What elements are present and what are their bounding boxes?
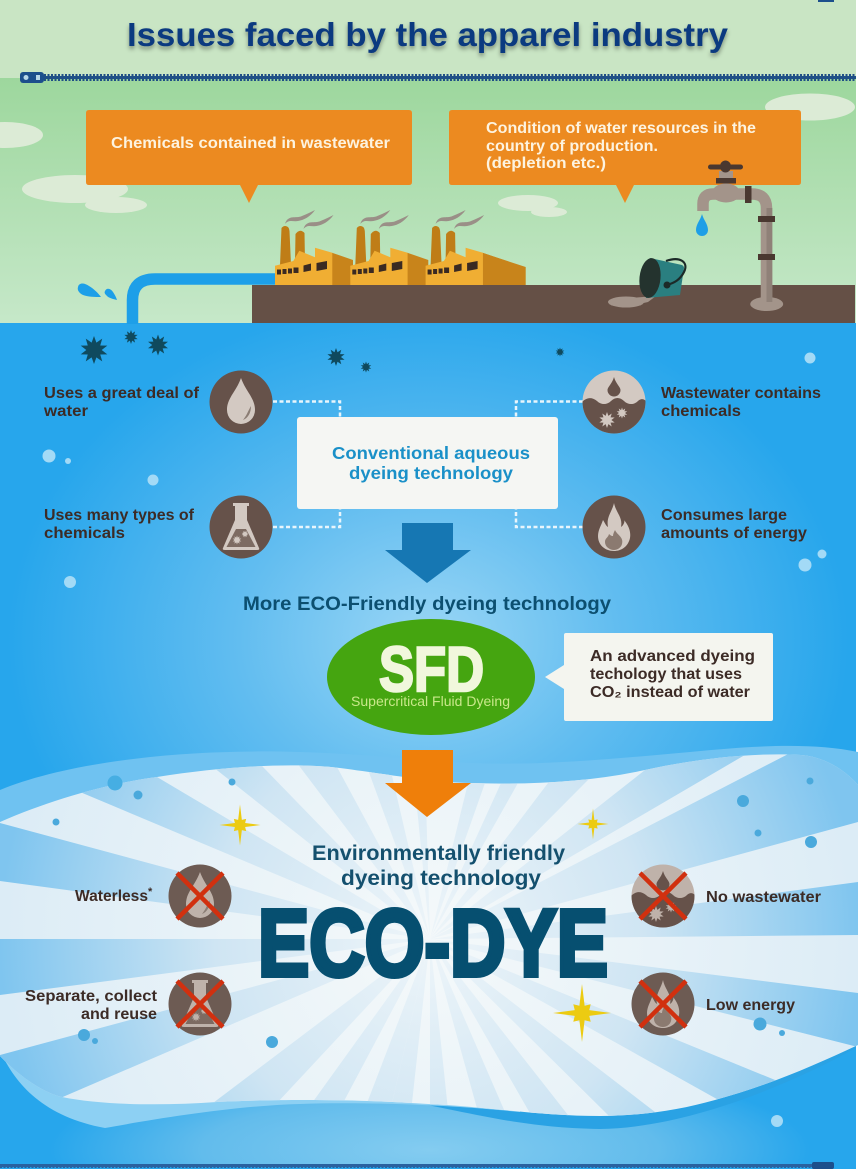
- wave: upper swoosh: [0, 746, 858, 840]
- benefit: waterless: [75, 864, 232, 928]
- benefit: no wastewater: No wastewater: [706, 889, 821, 906]
- clouds: [0, 94, 855, 217]
- bottom glow: [0, 1090, 856, 1165]
- issue: uses a great deal of water: Uses a great deal of: [44, 385, 200, 402]
- issue: uses many types of chemicals: Uses many types of: [44, 507, 195, 524]
- arrow: blue down: [385, 523, 471, 583]
- benefit: waterless: *: [148, 886, 153, 898]
- benefit: separate, collect and reuse: and reuse: [81, 1006, 157, 1023]
- wastewater pipe: [132, 279, 277, 324]
- callout: chemicals in wastewater: Chemicals contained in wastewater: [111, 135, 390, 152]
- benefit: no wastewater: [631, 864, 821, 928]
- benefit: separate, collect and reuse: [25, 972, 232, 1036]
- issue: uses a great deal of water: [43, 370, 272, 434]
- zipper: bottom: [0, 1162, 834, 1169]
- heading: more eco-friendly: More ECO-Friendly dyeing technology: [243, 594, 611, 615]
- small blue dots: [52, 776, 817, 1127]
- callout: condition of water resources: Condition of water resources in the: [486, 120, 756, 137]
- callout: chemicals in wastewater: [86, 110, 412, 203]
- badge: SFD: SFD: [379, 635, 484, 705]
- icon: dripping faucet: [696, 160, 783, 311]
- icon: water splashes: [78, 284, 117, 300]
- issue: consumes large amounts of energy: Consumes large: [661, 507, 787, 524]
- callout: SFD description: techology that uses: [590, 666, 742, 683]
- callout: condition of water resources: [449, 110, 801, 203]
- zipper: top: [20, 72, 856, 83]
- arrow: orange down: [385, 750, 471, 817]
- badge: SFD: Supercritical Fluid Dyeing: [351, 693, 510, 709]
- benefit: separate, collect and reuse: Separate, collect: [25, 988, 158, 1005]
- benefit: low energy: Low energy: [706, 997, 795, 1014]
- panel: conventional aqueous dyeing technology: dyeing technology: [349, 463, 513, 483]
- callout: condition of water resources: (depletion etc.): [486, 155, 606, 172]
- heading: ECO-DYE: ECO-DYE: [258, 890, 608, 996]
- callout: SFD description: [545, 633, 773, 721]
- panel: conventional aqueous dyeing technology: [297, 417, 558, 509]
- wave: lower swoosh dark: [400, 1030, 856, 1129]
- panel: title header band: [0, 0, 856, 78]
- callout: SFD description: CO₂ instead of water: [590, 684, 750, 701]
- heading: environmentally friendly: [312, 842, 565, 890]
- benefit: waterless: Waterless: [75, 888, 148, 905]
- panel: sunburst rays banner: [0, 754, 858, 1116]
- issue: uses many types of chemicals: [44, 496, 272, 558]
- ground: [252, 285, 855, 324]
- dark chemical particles: [81, 330, 564, 372]
- wave: lower swoosh light: [0, 1040, 520, 1128]
- heading: environmentally friendly: Environmentally friendly: [312, 842, 565, 865]
- issue: consumes large amounts of energy: amounts of energy: [661, 525, 807, 542]
- panel: green landscape sky: [0, 78, 856, 324]
- issue: wastewater contains chemicals: [582, 370, 821, 434]
- issue: uses a great deal of water: water: [43, 403, 88, 420]
- heading: environmentally friendly: dyeing technology: [341, 867, 541, 890]
- callout: condition of water resources: country of production.: [486, 138, 658, 155]
- zipper pull: top right corner: [818, 0, 834, 2]
- dotted connectors: [273, 402, 583, 527]
- badge: SFD: [327, 619, 535, 735]
- title: Issues faced by the apparel industry: [127, 16, 729, 53]
- benefit: low energy: [632, 972, 795, 1036]
- factories: [275, 210, 526, 285]
- icon: bucket and puddle: [608, 257, 685, 308]
- yellow sparkles: [220, 804, 611, 1042]
- water bubbles: [42, 352, 826, 588]
- issue: wastewater contains chemicals: chemicals: [661, 403, 741, 420]
- water background: [0, 323, 856, 1169]
- issue: wastewater contains chemicals: Wastewater contains: [661, 385, 821, 402]
- panel: conventional aqueous dyeing technology: Conventional aqueous: [332, 443, 530, 463]
- callout: SFD description: An advanced dyeing: [590, 648, 755, 665]
- issue: uses many types of chemicals: chemicals: [44, 525, 125, 542]
- issue: consumes large amounts of energy: [582, 496, 807, 558]
